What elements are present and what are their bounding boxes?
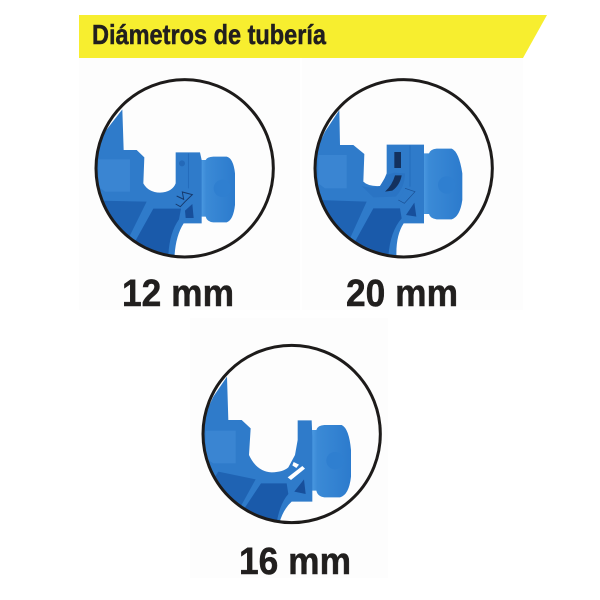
lock key (398, 188, 415, 203)
illustration: clamp at 20 mm (312, 80, 492, 260)
windows (104, 200, 146, 236)
cap (200, 157, 235, 222)
illustration: clamp at 12 mm (92, 80, 273, 260)
title: Diámetros de tubería (92, 19, 326, 50)
windows (394, 152, 401, 168)
faint photo backgrounds (79, 58, 523, 578)
illustration: clamp at 16 mm (200, 345, 380, 527)
cap (310, 425, 351, 497)
windows (216, 472, 256, 505)
title banner (79, 15, 547, 58)
label: 16 mm (239, 541, 351, 583)
panel: 20 mm (312, 80, 492, 315)
label: 12 mm (122, 273, 234, 315)
panel: 16 mm (200, 345, 380, 583)
panel: 12 mm (92, 80, 273, 315)
cap (422, 149, 462, 219)
lock key (176, 192, 192, 207)
body (200, 377, 312, 527)
label: 20 mm (346, 273, 458, 315)
body (92, 109, 202, 260)
body (312, 110, 424, 260)
lock gap (288, 466, 305, 480)
